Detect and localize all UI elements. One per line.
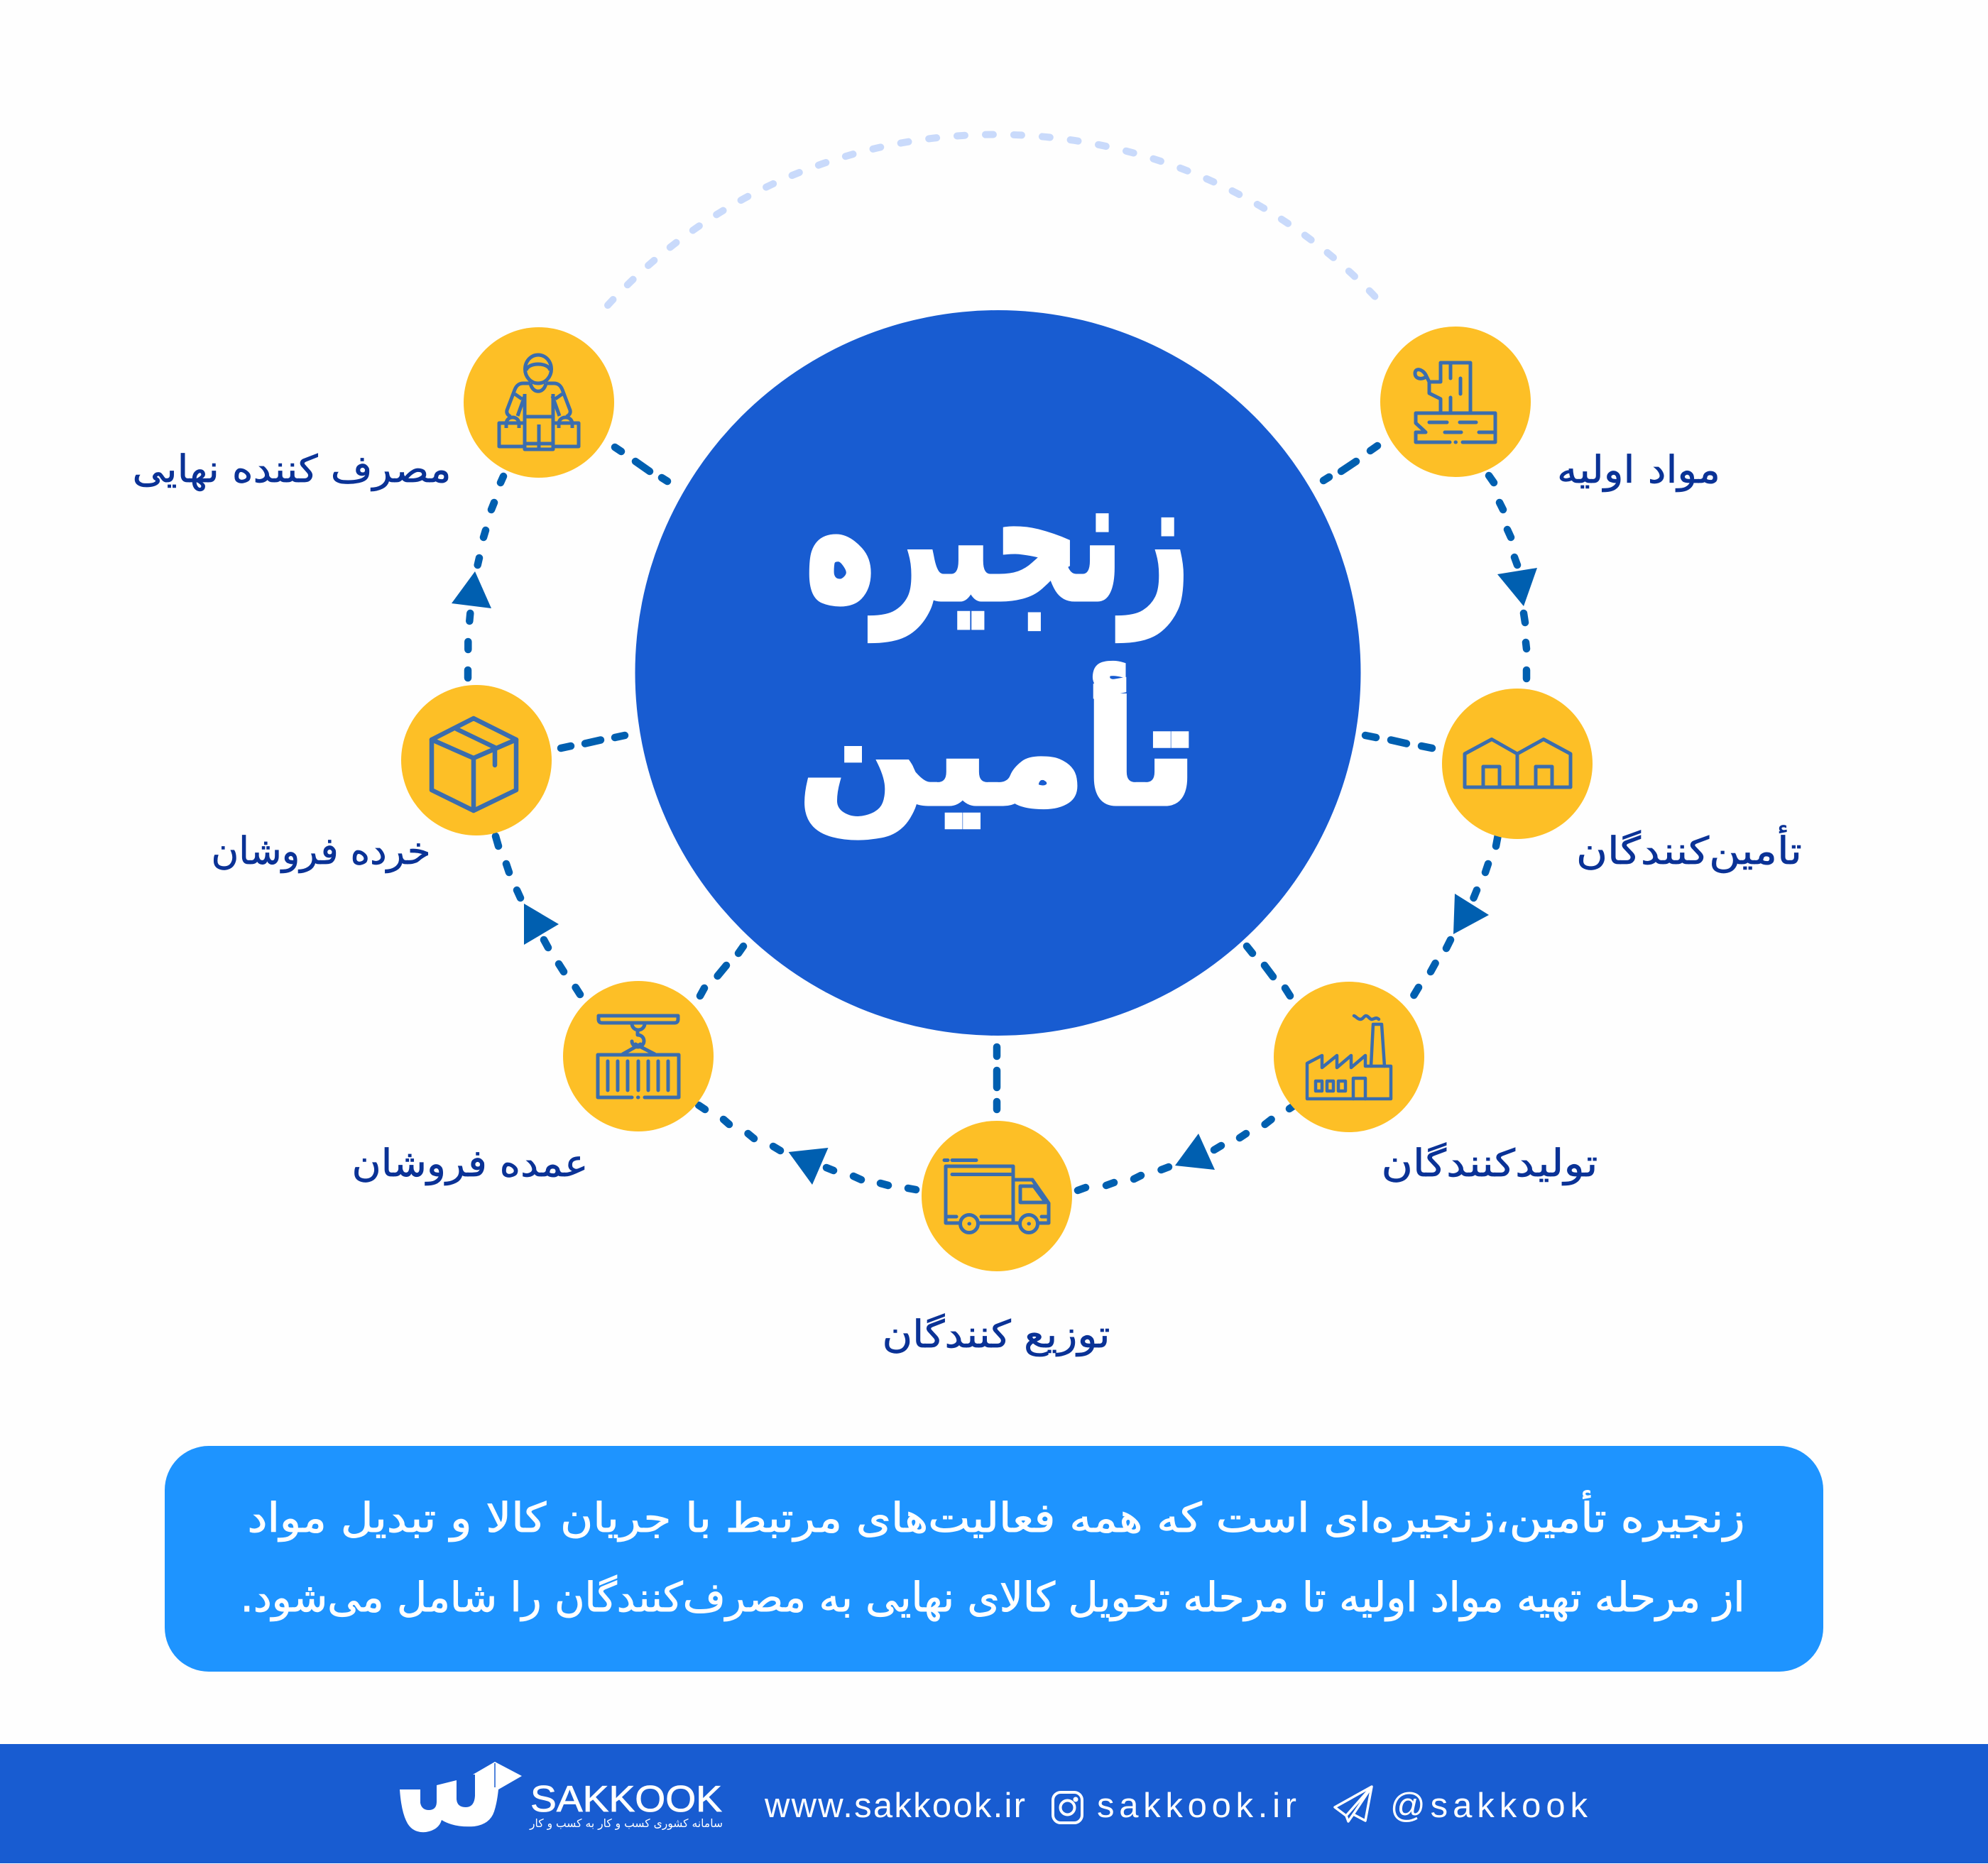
definition line 1: زنجیره تأمین،زنجیره‌ای است که همه فعالیت‌های مرتبط با جریان کالا و تبدیل مواد (247, 1490, 1745, 1542)
stage: raw materials (1380, 327, 1720, 492)
arrow connector: suppliers to manufacturers (1414, 835, 1498, 995)
stage: suppliers (1442, 689, 1802, 873)
label: wholesalers: عمده فروشان (352, 1142, 588, 1185)
central circle with title (635, 310, 1360, 1036)
icon: container on crane hook (598, 1016, 679, 1097)
brand name: SAKKOOK (530, 1779, 722, 1820)
instagram handle: sakkook.ir (1097, 1787, 1296, 1825)
arrow connector: wholesalers to retailers (496, 836, 580, 994)
label: distributors: توزیع کنندگان (882, 1313, 1110, 1356)
panel: definition text (165, 1446, 1823, 1672)
icon: warehouses (1465, 740, 1571, 787)
arrow connector: distributors to wholesalers (699, 1105, 916, 1190)
arrow connector: retailers to end consumers (452, 476, 503, 678)
website address: www.sakkook.ir (764, 1787, 1025, 1825)
label: retailers: خرده فروشان (212, 830, 430, 873)
label: manufacturers: تولیدکنندگان (1382, 1142, 1598, 1185)
stage: distributors (882, 1121, 1110, 1356)
logo mark (400, 1762, 522, 1832)
title: زنجیره: زنجیره (806, 440, 1189, 640)
label: raw materials: مواد اولیه (1557, 449, 1720, 492)
icon: instagram (1053, 1792, 1082, 1823)
label: suppliers: تأمین‌کنندگان (1576, 825, 1802, 873)
arrow connector: raw materials to suppliers (1489, 476, 1537, 679)
label: end consumers: مصرف کننده نهایی (132, 448, 452, 491)
stage: end consumers (132, 327, 614, 491)
icon: shopper with bags (499, 355, 579, 449)
icon: factory (1307, 1016, 1391, 1099)
stage: retailers (212, 685, 552, 873)
arrow connector: manufacturers to distributors (1078, 1106, 1294, 1190)
decorative top dashed arc (608, 134, 1383, 305)
icon: telegram plane (1335, 1787, 1372, 1821)
stage: wholesalers (352, 981, 714, 1185)
definition line 2: از مرحله تهیه مواد اولیه تا مرحله تحویل کالای نهایی به مصرف‌کنندگان را شامل می‌شود. (240, 1574, 1745, 1621)
title: تأمین: تأمین (799, 664, 1196, 837)
footer band (0, 1744, 1988, 1863)
icon: tree stump on wood plank (1415, 363, 1495, 442)
brand tagline: سامانه کشوری کسب و کار به کسب و کار (529, 1816, 723, 1831)
icon: delivery truck (944, 1160, 1049, 1232)
stage: manufacturers (1274, 982, 1598, 1185)
telegram handle: @sakkook (1390, 1787, 1588, 1825)
spoke connectors from centre to stages (561, 446, 1432, 1109)
icon: cardboard box (432, 718, 516, 811)
